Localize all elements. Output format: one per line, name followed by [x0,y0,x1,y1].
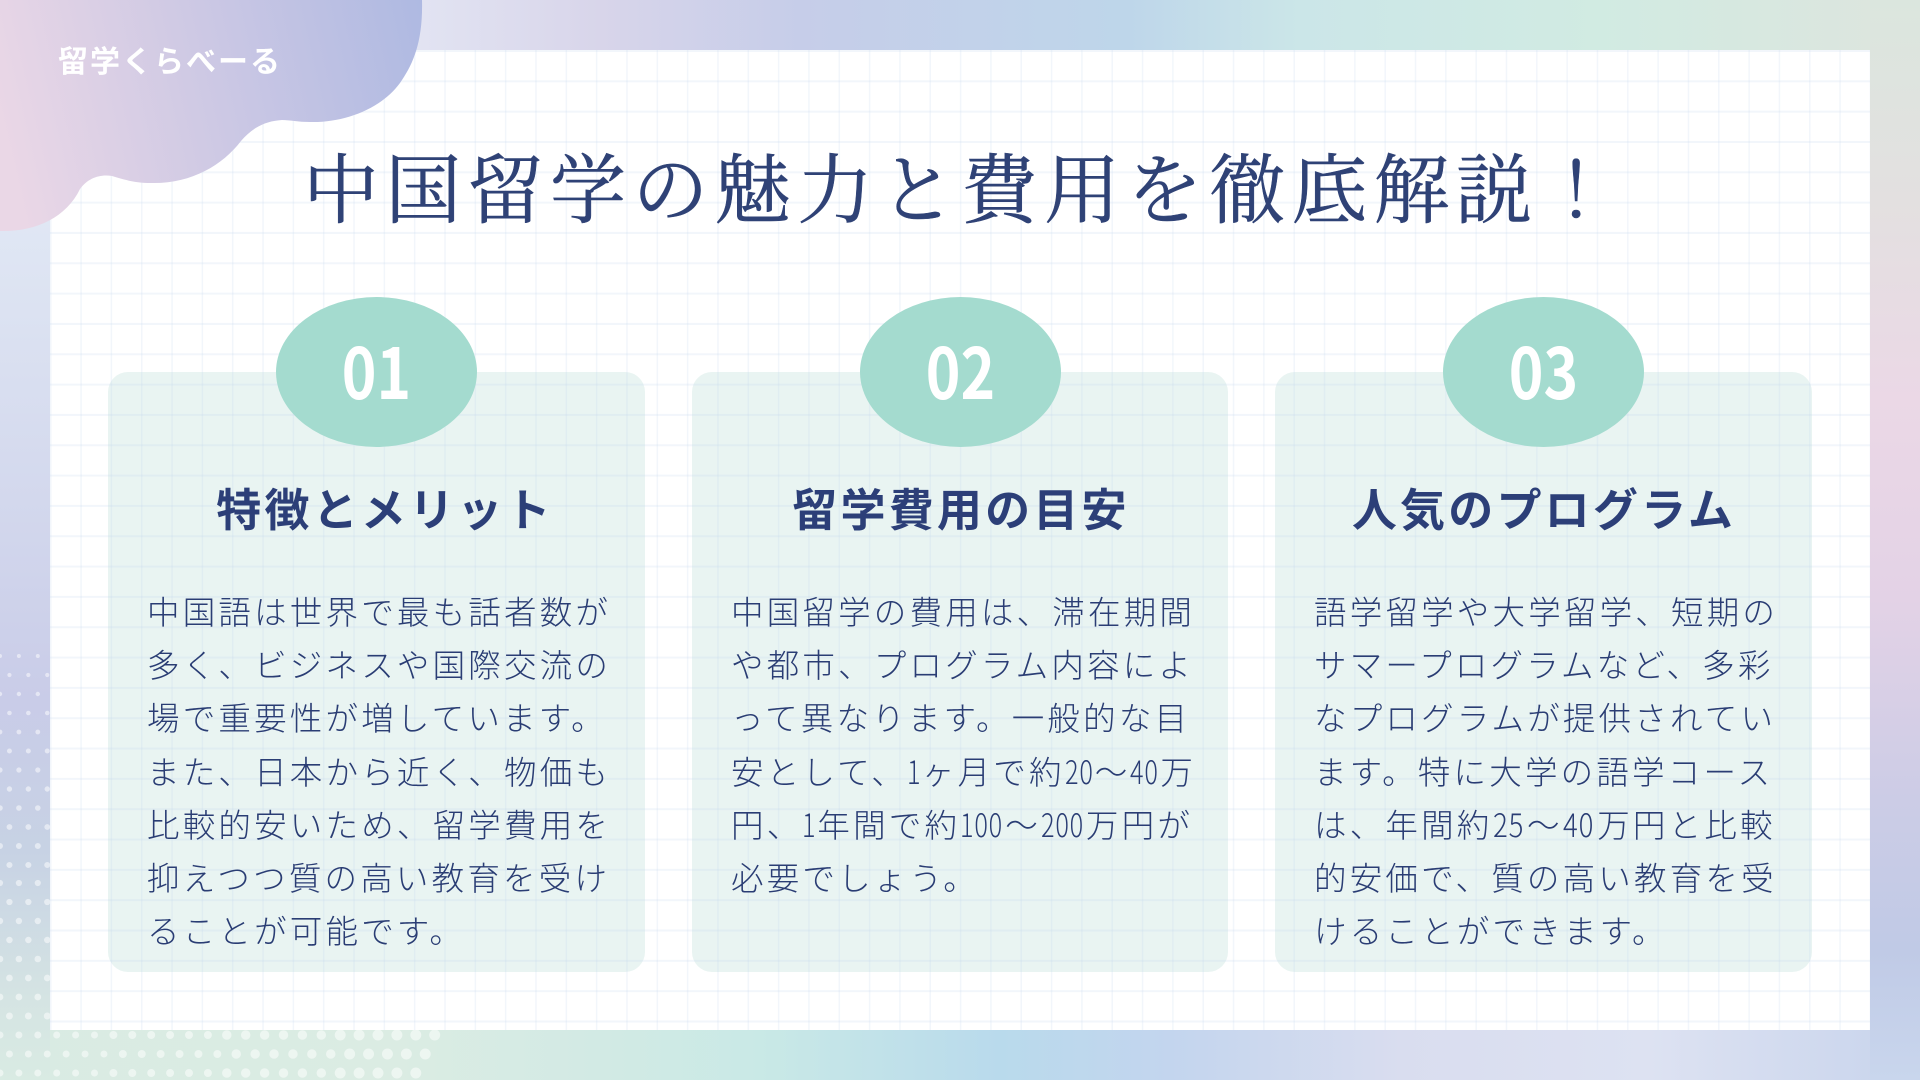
body text: card 2: 必要でしょう。 [731,853,979,900]
body text: card 3: 語学留学や大学留学、短期の [1314,587,1778,634]
body text: card 1: ることが可能です。 [147,906,465,953]
number badge 01 [276,297,477,447]
body text: card 1: 中国語は世界で最も話者数が [147,587,611,634]
heading: card 2: 留学費用の目安 [792,474,1130,539]
body text: card 2: 40 [1130,747,1159,794]
body text: card 2: 円、 年間で約 〜 万円が [731,800,1193,847]
body text: card 2: 安として、 ヶ月で約 〜 万 [731,747,1196,794]
heading: card 3: 人気のプログラム [1352,474,1736,539]
number 01: 01 [342,319,411,420]
body text: card 3: 40 [1563,800,1594,847]
body text: card 3: サマープログラムなど、多彩 [1314,640,1774,687]
number badge 02 [860,297,1061,447]
number badge 03 [1443,297,1644,447]
body text: card 1: 比較的安いため、留学費用を [147,800,611,847]
heading: card 1: 特徴とメリット [216,474,554,539]
body text: card 3: 25 [1493,800,1524,847]
body text: card 2: って異なります。一般的な目 [731,693,1190,740]
title: 中国留学の魅力と費用を徹底解説！ [303,130,1621,238]
body text: card 1: 抑えつつ質の高い教育を受け [147,853,610,900]
body text: card 2: 200 [1041,800,1084,847]
number 03: 03 [1509,319,1578,420]
body text: card 2: や都市、プログラム内容によ [731,640,1194,687]
card 1 background [108,372,645,972]
body text: card 3: 的安価で、質の高い教育を受 [1314,853,1777,900]
background: top strip [0,0,1920,50]
body text: card 2: 1 [802,800,817,847]
body text: card 3: は、年間約 〜 万円と比較 [1314,800,1776,847]
body text: card 1 [147,587,611,953]
body text: card 1: 場で重要性が増しています。 [147,693,607,740]
number 02: 02 [926,319,995,420]
body text: card 3: なプログラムが提供されてい [1314,693,1776,740]
background: bottom strip [0,1030,1920,1080]
body text: card 3 [1314,587,1778,953]
background: left strip [0,0,50,1080]
body text: card 2 [731,587,1196,900]
corner blob [0,0,422,231]
body text: card 3: ます。特に大学の語学コース [1314,747,1773,794]
body text: card 1: 多く、ビジネスや国際交流の [147,640,611,687]
body text: card 2: 1 [907,747,921,794]
body text: card 2: 20 [1065,747,1093,794]
body text: card 2: 100 [960,800,1003,847]
body text: card 2: 中国留学の費用は、滞在期間 [731,587,1195,634]
card 3 background [1275,372,1812,972]
card 2 background [692,372,1228,972]
background: right strip [1870,0,1920,1080]
body text: card 1: また、日本から近く、物価も [147,747,611,794]
logo text: 留学くらべーる [58,36,282,80]
body text: card 3: けることができます。 [1314,906,1668,953]
